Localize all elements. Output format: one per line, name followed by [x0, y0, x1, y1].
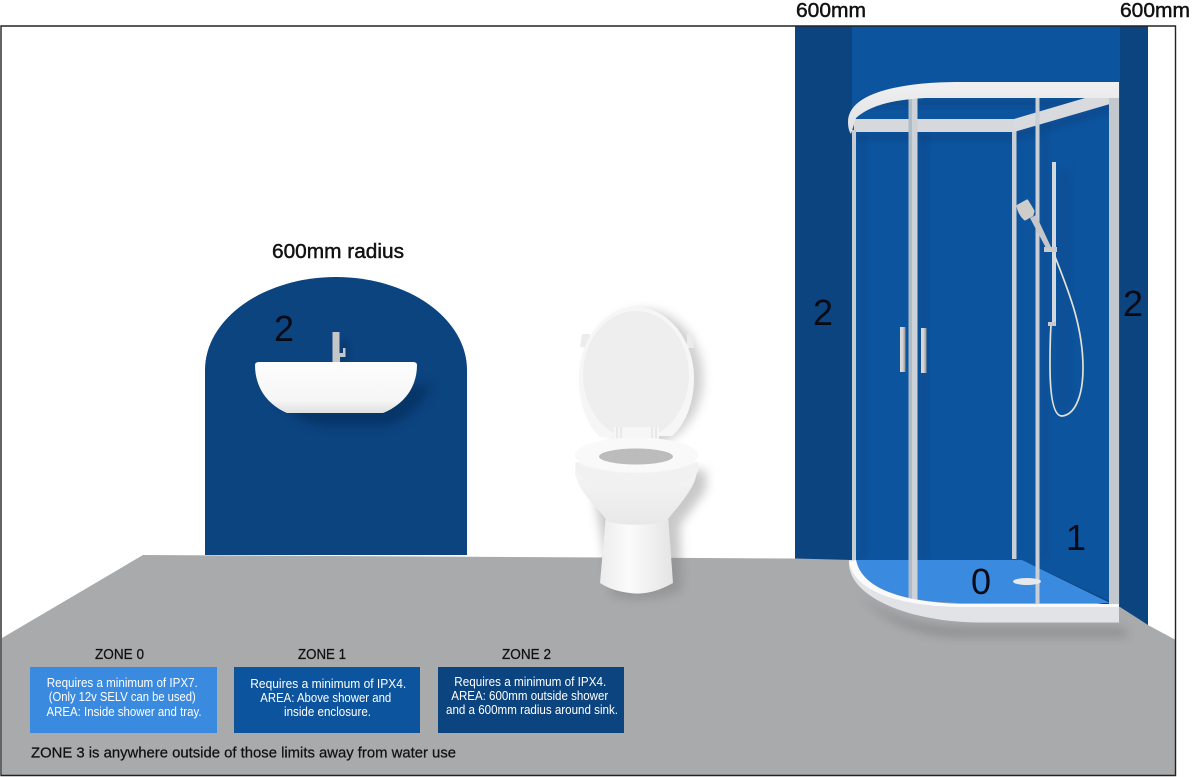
drain — [1013, 578, 1041, 585]
legend card: zone 0: AREA: Inside shower and tray. — [46, 705, 202, 719]
sliding door posts — [908, 98, 912, 601]
back wall corner post — [1012, 130, 1016, 559]
shower zone 2 wall band: left and right — [795, 26, 1148, 626]
zone label: sink 2: 2 — [274, 308, 294, 349]
white wedge above right floor edge — [1148, 26, 1176, 640]
legend heading: zone 2: ZONE 2 — [502, 646, 551, 663]
legend card: zone 1: Requires a minimum of IPX4. — [250, 677, 406, 691]
shadows on wall — [860, 132, 866, 560]
diagonal top rail — [1014, 98, 1110, 132]
front left frame post — [852, 130, 856, 562]
bowl — [575, 462, 698, 525]
rail brackets — [1044, 247, 1057, 252]
zone label: right shower 2: 2 — [1123, 283, 1143, 324]
zone label: 0: 0 — [971, 561, 991, 602]
icon: toilet — [575, 307, 706, 599]
legend card: zone 1 — [234, 667, 420, 733]
grey floor — [2, 555, 1176, 775]
legend card: zone 1: inside enclosure. — [284, 705, 371, 719]
dimension label: shower left 600mm: 600mm — [796, 0, 866, 22]
seat — [575, 438, 698, 472]
legend card: zone 2 — [438, 667, 624, 733]
legend card: zone 0: (Only 12v SELV can be used) — [49, 690, 196, 704]
legend card: zone 2: and a 600mm radius around sink. — [446, 703, 618, 717]
icon: sink with tap — [255, 332, 432, 426]
shower handset — [1030, 215, 1051, 248]
dimension label: shower right 600mm: 600mm — [1120, 0, 1190, 22]
dimension label: sink radius: 600mm radius — [272, 241, 404, 263]
hinges behind lid — [580, 334, 590, 348]
curved top rail — [848, 82, 1119, 134]
zone label: 1: 1 — [1066, 517, 1086, 558]
legend card: zone 0 — [30, 667, 217, 733]
lid — [579, 307, 694, 437]
legend card: zone 2: AREA: 600mm outside shower — [451, 689, 608, 703]
seat hinges — [614, 427, 659, 439]
rim band — [576, 462, 698, 490]
right door post — [1036, 98, 1040, 605]
legend card: zone 1: AREA: Above shower and — [260, 691, 391, 705]
legend heading: zone 1: ZONE 1 — [298, 646, 346, 663]
legend card: zone 2: Requires a minimum of IPX4. — [454, 675, 606, 689]
zone label: left shower 2: 2 — [813, 292, 833, 333]
seat opening — [599, 448, 673, 464]
wall side post — [1109, 97, 1119, 607]
legend heading: zone 0: ZONE 0 — [95, 646, 144, 663]
zone 3 note: ZONE 3 is anywhere outside of those limits away from water use — [31, 744, 456, 762]
curved tray rim — [849, 560, 1119, 622]
icon: quadrant shower enclosure — [848, 82, 1130, 636]
shower hose — [1050, 254, 1083, 416]
tray floor, zone 0 — [856, 560, 1110, 603]
door handles — [900, 327, 906, 372]
pedestal — [600, 515, 673, 594]
zone 2 arch around sink — [205, 277, 467, 555]
shower zone 1 wall panel — [852, 26, 1120, 606]
bowl shadow — [590, 470, 706, 599]
basin — [255, 362, 417, 413]
shower riser rail — [1052, 162, 1056, 323]
legend card: zone 0: Requires a minimum of IPX7. — [47, 676, 198, 690]
lid shadow — [587, 310, 703, 446]
tap — [332, 332, 346, 362]
tray shadow on floor — [860, 592, 1130, 636]
lower top rail — [854, 119, 1014, 132]
